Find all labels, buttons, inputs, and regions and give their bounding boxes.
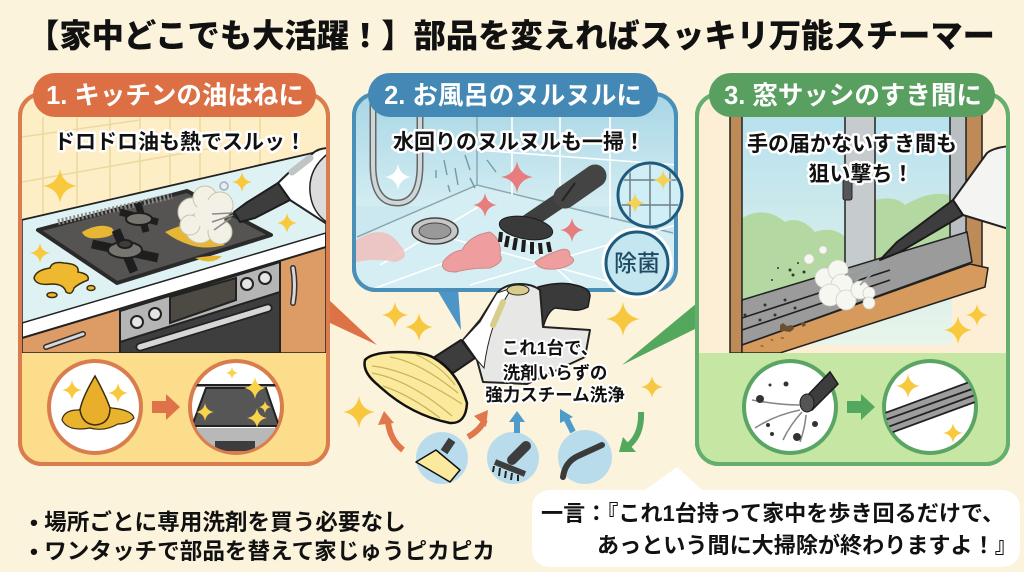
center caption: 洗剤いらずの bbox=[503, 363, 607, 383]
steamer bbox=[880, 146, 1012, 260]
center steamer bbox=[365, 283, 590, 423]
badge: sterilization bbox=[604, 230, 670, 296]
sparkles bbox=[944, 304, 988, 344]
water drops bbox=[436, 155, 496, 192]
panel: window bbox=[697, 73, 1012, 465]
cabinet handles bbox=[46, 268, 294, 347]
bottom band bbox=[20, 353, 328, 465]
drain bbox=[412, 218, 458, 244]
sparkles bbox=[30, 169, 297, 263]
circle: oil bbox=[49, 361, 141, 453]
circle: clean track bbox=[884, 361, 976, 453]
cycle arrows bbox=[388, 412, 641, 450]
sash track bbox=[742, 232, 972, 345]
bullet list: • ワンタッチで部品を替えて家じゅうピカピカ bbox=[30, 539, 495, 564]
speech bubble: あっという間に大掃除が終わりますよ！』 bbox=[597, 533, 1017, 558]
shower hose bbox=[373, 100, 420, 203]
stains bbox=[356, 232, 574, 272]
center caption: 強力スチーム洗浄 bbox=[485, 385, 625, 405]
panel 2 tail bbox=[436, 288, 461, 330]
subheading 1: ドロドロ油も熱でスルッ！ bbox=[54, 131, 306, 154]
badge: sterilization: 除菌 bbox=[614, 250, 660, 276]
subheading 2: 水回りのヌルヌルも一掃！ bbox=[393, 131, 645, 154]
heading pill 3: 3. 窓サッシのすき間に bbox=[724, 82, 982, 110]
arrow: kitchen bbox=[152, 394, 180, 420]
center caption bbox=[485, 338, 625, 405]
brush attachment bbox=[498, 176, 595, 254]
handle bbox=[533, 283, 590, 328]
body bbox=[463, 284, 590, 384]
mop head bbox=[365, 352, 467, 423]
arrow: window bbox=[847, 394, 875, 420]
circle: clean oven bbox=[190, 361, 282, 453]
circle: dust blast bbox=[744, 361, 838, 453]
bullet list bbox=[30, 509, 495, 564]
speech bubble bbox=[532, 467, 1020, 567]
attachment: mop bbox=[416, 432, 468, 484]
heading pill 2 bbox=[368, 73, 658, 117]
burners bbox=[92, 203, 158, 272]
steam lines bbox=[212, 213, 233, 230]
attachment: nozzle bbox=[558, 430, 612, 484]
panel: kitchen bbox=[20, 73, 330, 465]
circle: clean tile bbox=[618, 160, 682, 230]
glass and sky bbox=[740, 110, 952, 345]
oven bbox=[120, 262, 280, 353]
wall tiles bbox=[22, 117, 260, 215]
title: 【家中どこでも大活躍！】部品を変えればスッキリ万能スチーマー bbox=[27, 18, 995, 54]
oil spill bbox=[34, 263, 95, 298]
speech bubble: 一言：『これ1台持って家中を歩き回るだけで、 bbox=[541, 501, 1004, 526]
tile lines bbox=[370, 117, 676, 290]
subheading 3: 手の届かないすき間も bbox=[747, 133, 957, 156]
sparkles bbox=[473, 161, 584, 242]
bottom band bbox=[697, 353, 1008, 465]
subheading 3: 狙い撃ち！ bbox=[808, 163, 914, 186]
trees bbox=[742, 194, 950, 299]
dirt bbox=[760, 322, 806, 347]
heading pill 1: 1. キッチンの油はねに bbox=[46, 82, 304, 110]
panel 3 tail bbox=[622, 303, 697, 365]
steam bbox=[804, 246, 875, 310]
bullet list: • 場所ごとに専用洗剤を買う必要なし bbox=[30, 509, 406, 535]
lock bbox=[843, 180, 852, 200]
arrowheads bbox=[378, 409, 636, 452]
panel: bathroom bbox=[354, 73, 682, 296]
steamer bbox=[234, 148, 330, 226]
center sparkles bbox=[343, 302, 663, 428]
countertop bbox=[22, 150, 326, 338]
heading pill 3 bbox=[709, 73, 995, 117]
attachment: brush bbox=[487, 432, 539, 484]
heading pill 1 bbox=[33, 73, 316, 117]
center caption: これ1台で、 bbox=[502, 338, 598, 358]
subheading 3 bbox=[747, 133, 957, 186]
neck bbox=[433, 340, 475, 373]
panel 1 tail bbox=[328, 299, 377, 345]
steam cloud bbox=[178, 186, 233, 244]
cabinet bbox=[22, 240, 326, 353]
cooktop bbox=[38, 191, 271, 283]
frame bbox=[730, 110, 982, 353]
heading pill 2: 2. お風呂のヌルヌルに bbox=[384, 82, 642, 110]
sill bbox=[742, 264, 988, 353]
wall bbox=[356, 96, 674, 164]
